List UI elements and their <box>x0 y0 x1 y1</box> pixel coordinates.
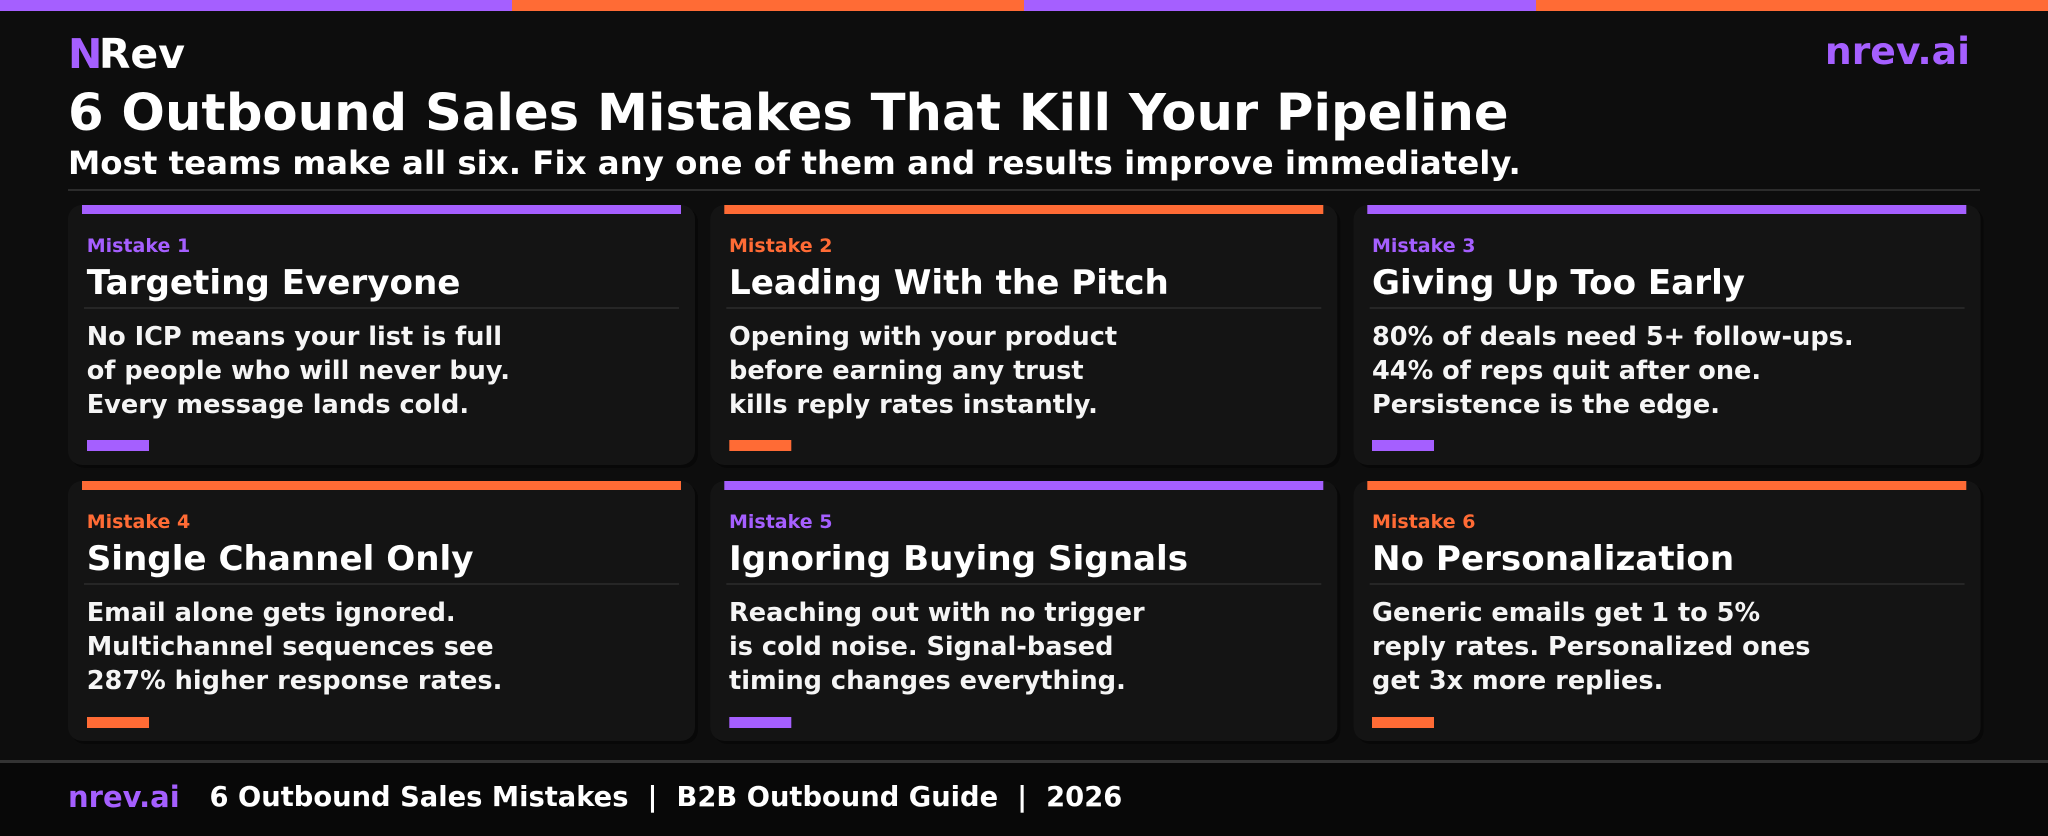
body text: is cold noise. Signal-based <box>729 632 1113 662</box>
body text: 287% higher response rates. <box>87 666 502 696</box>
body text: Email alone gets ignored. <box>87 598 456 628</box>
label: Mistake 2 <box>729 235 832 257</box>
label: Mistake 6 <box>1372 511 1475 533</box>
body text: reply rates. Personalized ones <box>1372 632 1810 662</box>
panel: mistake 5 <box>710 481 1340 744</box>
body text: Opening with your product <box>729 322 1117 352</box>
label: Mistake 5 <box>729 511 832 533</box>
body text: before earning any trust <box>729 356 1084 386</box>
heading: Leading With the Pitch <box>729 263 1169 303</box>
body text: Persistence is the edge. <box>1372 390 1720 420</box>
footer band <box>0 760 2048 836</box>
accent bar <box>729 440 791 451</box>
accent bar <box>1372 717 1434 728</box>
label: Mistake 3 <box>1372 235 1475 257</box>
body text: 80% of deals need 5+ follow-ups. <box>1372 322 1854 352</box>
heading: Single Channel Only <box>87 539 474 579</box>
heading: Targeting Everyone <box>87 263 460 303</box>
body text: Every message lands cold. <box>87 390 469 420</box>
body text: timing changes everything. <box>729 666 1126 696</box>
body text: 44% of reps quit after one. <box>1372 356 1761 386</box>
top colour bar <box>0 0 2048 11</box>
accent bar <box>1372 440 1434 451</box>
body text: get 3x more replies. <box>1372 666 1663 696</box>
footer url: nrev.ai <box>68 780 180 814</box>
site url: nrev.ai <box>1825 29 1970 73</box>
body text: Generic emails get 1 to 5% <box>1372 598 1760 628</box>
accent bar <box>729 717 791 728</box>
accent bar <box>87 440 149 451</box>
label: Mistake 1 <box>87 235 190 257</box>
heading: No Personalization <box>1372 539 1734 579</box>
title: 6 Outbound Sales Mistakes That Kill Your Pipeline <box>68 83 1509 143</box>
accent bar <box>87 717 149 728</box>
footer text: 6 Outbound Sales Mistakes | B2B Outbound Guide | 2026 <box>210 782 1122 813</box>
panel: mistake 6 <box>1354 481 1984 744</box>
label: Mistake 4 <box>87 511 190 533</box>
body text: Reaching out with no trigger <box>729 598 1145 628</box>
body text: of people who will never buy. <box>87 356 510 386</box>
body text: No ICP means your list is full <box>87 322 502 352</box>
panel: mistake 4 <box>68 481 698 744</box>
subtitle: Most teams make all six. Fix any one of them and results improve immediately. <box>68 144 1521 182</box>
body text: Multichannel sequences see <box>87 632 494 662</box>
logo: NRev: NRev <box>68 30 185 78</box>
panel: mistake 1 <box>68 205 698 468</box>
panel: mistake 2 <box>710 205 1340 468</box>
body text: kills reply rates instantly. <box>729 390 1098 420</box>
panel: mistake 3 <box>1354 205 1984 468</box>
heading: Giving Up Too Early <box>1372 263 1745 303</box>
heading: Ignoring Buying Signals <box>729 539 1188 579</box>
